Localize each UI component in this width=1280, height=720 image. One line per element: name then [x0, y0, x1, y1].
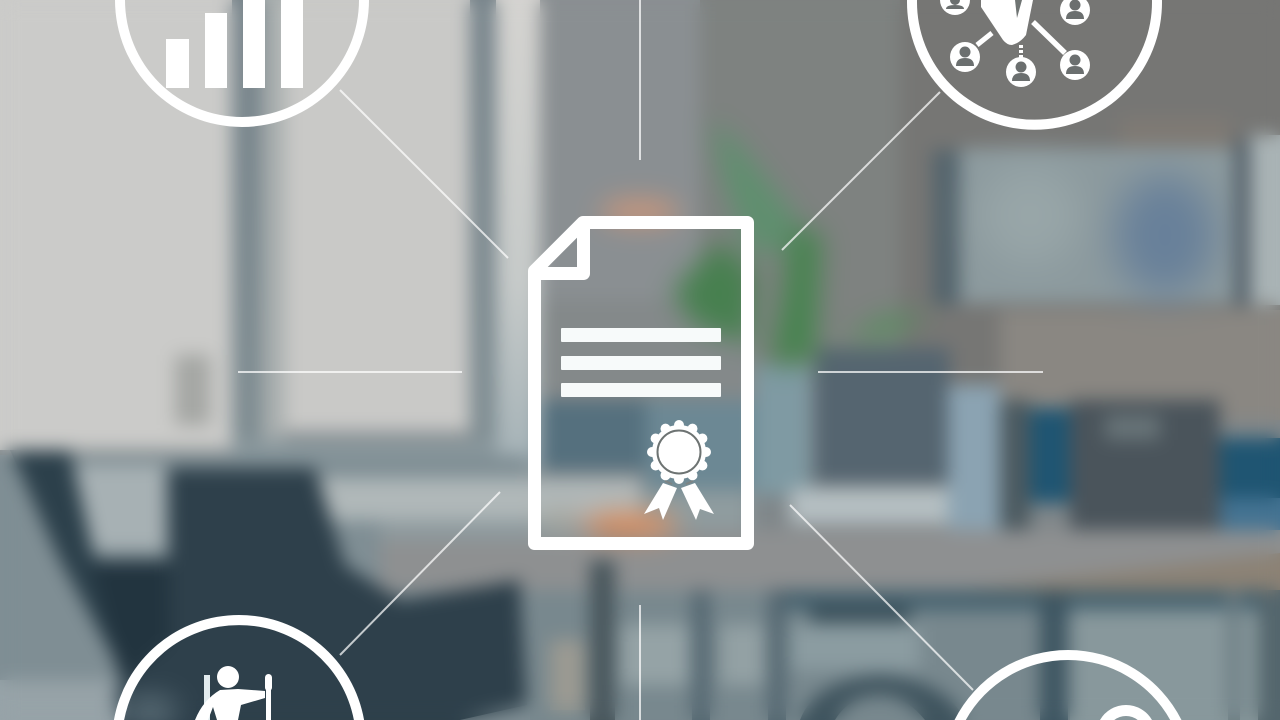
icon: partial circle with pin ring: [954, 650, 1182, 720]
icon: certificate document: [534, 222, 748, 544]
icon: hiker in circle: [114, 615, 364, 720]
connector lines: [238, 0, 1043, 720]
document text lines: [561, 328, 721, 397]
icon: award seal with ribbons: [644, 420, 714, 520]
icon: leader tie and people network in circle: [907, 0, 1162, 130]
icon: bar chart in circle: [115, 0, 369, 127]
